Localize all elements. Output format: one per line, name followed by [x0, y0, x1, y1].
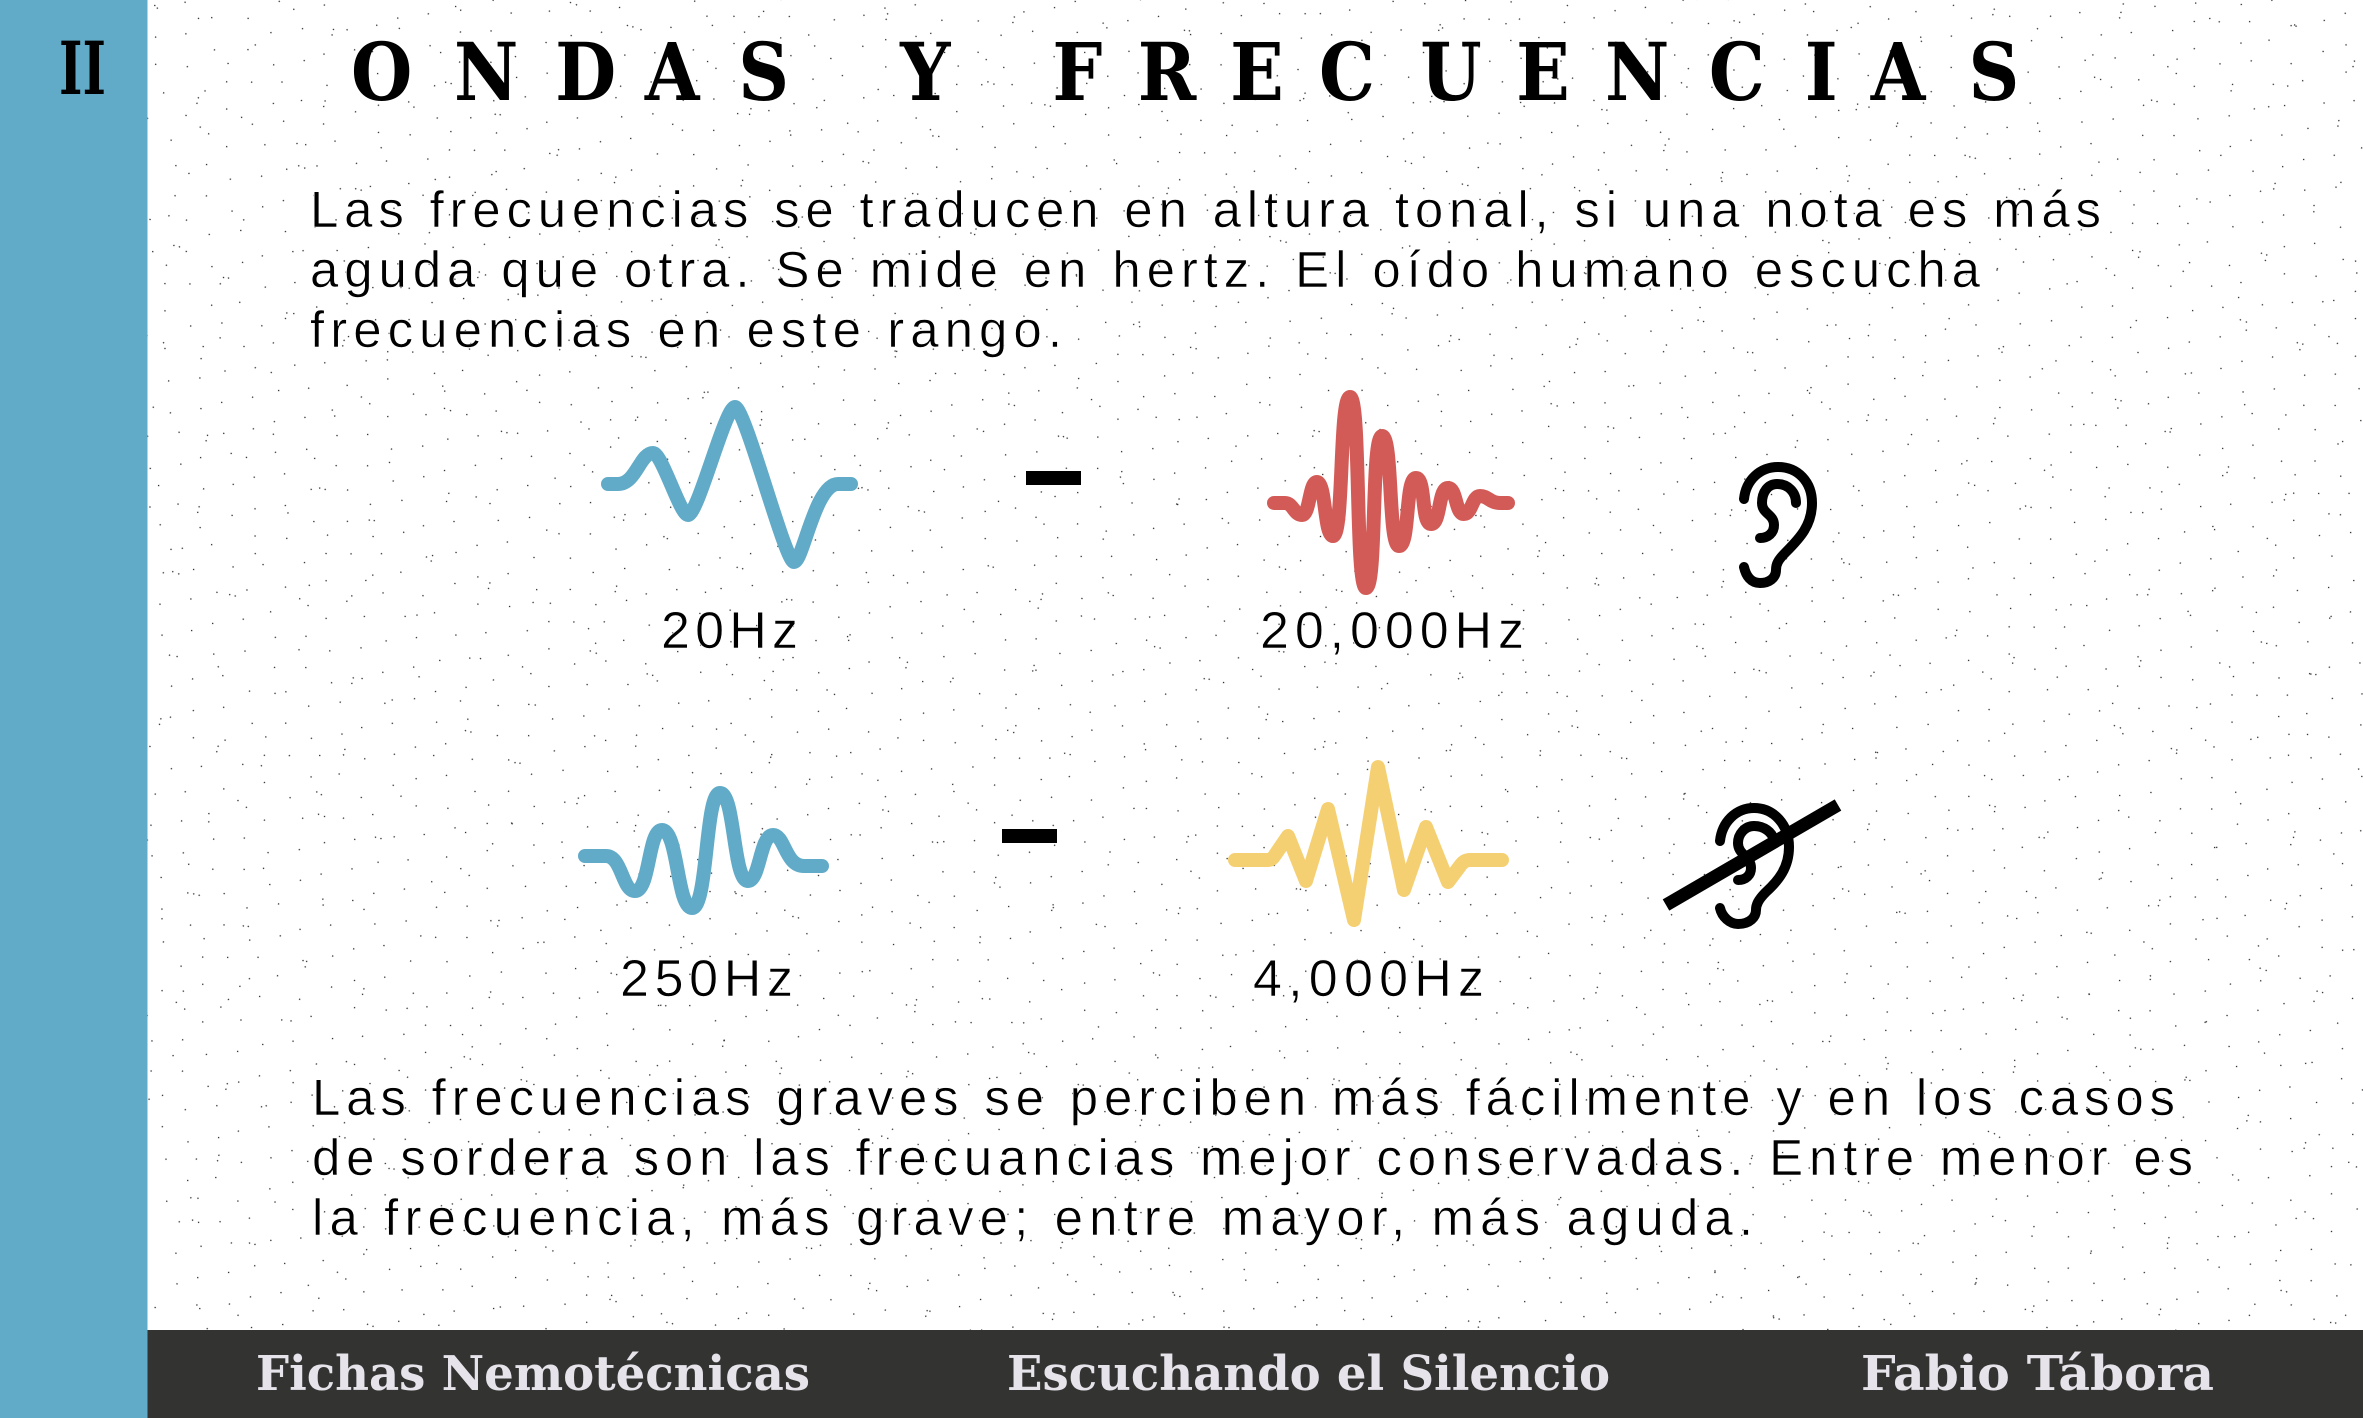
text block: intro paragraph: Las frecuencias se traducen en altura tonal, si una nota es más: [310, 181, 2101, 238]
wave: 20,000Hz red: [1274, 397, 1508, 588]
icon: ear: [1744, 467, 1812, 583]
footer: author: Fabio Tábora: [1861, 1346, 2214, 1402]
text block: intro paragraph: aguda que otra. Se mide en hertz. El oído humano escucha: [310, 241, 1981, 298]
text block: intro paragraph: frecuencias en este rango.: [310, 301, 1062, 358]
wave: 250Hz blue: [585, 793, 822, 908]
text block: intro paragraph: [310, 181, 2101, 358]
wave: 4,000Hz yellow: [1235, 767, 1502, 920]
text block: closing paragraph: Las frecuencias graves se perciben más fácilmente y en los casos: [312, 1069, 2175, 1126]
footer bar: [148, 1330, 2363, 1418]
title: ONDAS Y FRECUENCIAS: [351, 25, 2019, 119]
label: 20Hz: 20Hz: [661, 602, 798, 660]
text block: closing paragraph: la frecuencia, más grave; entre mayor, más aguda.: [312, 1189, 1753, 1246]
footer: project name: Escuchando el Silencio: [1007, 1346, 1610, 1402]
section number: II: [59, 26, 106, 112]
label: 4,000Hz: 4,000Hz: [1253, 950, 1484, 1008]
text block: closing paragraph: de sordera son las frecuancias mejor conservadas. Entre menor es: [312, 1129, 2193, 1186]
left sidebar with section number: [0, 0, 148, 1418]
footer: series name: Fichas Nemotécnicas: [256, 1346, 810, 1402]
text block: closing paragraph: [312, 1069, 2193, 1246]
label: 250Hz: 250Hz: [620, 950, 793, 1008]
icon: crossed-out ear: [1666, 805, 1838, 924]
wave: 20Hz blue: [608, 407, 851, 562]
dash between 20Hz and 20,000Hz: [1026, 471, 1081, 485]
label: 20,000Hz: 20,000Hz: [1260, 602, 1524, 660]
dash between 250Hz and 4,000Hz: [1002, 829, 1057, 843]
